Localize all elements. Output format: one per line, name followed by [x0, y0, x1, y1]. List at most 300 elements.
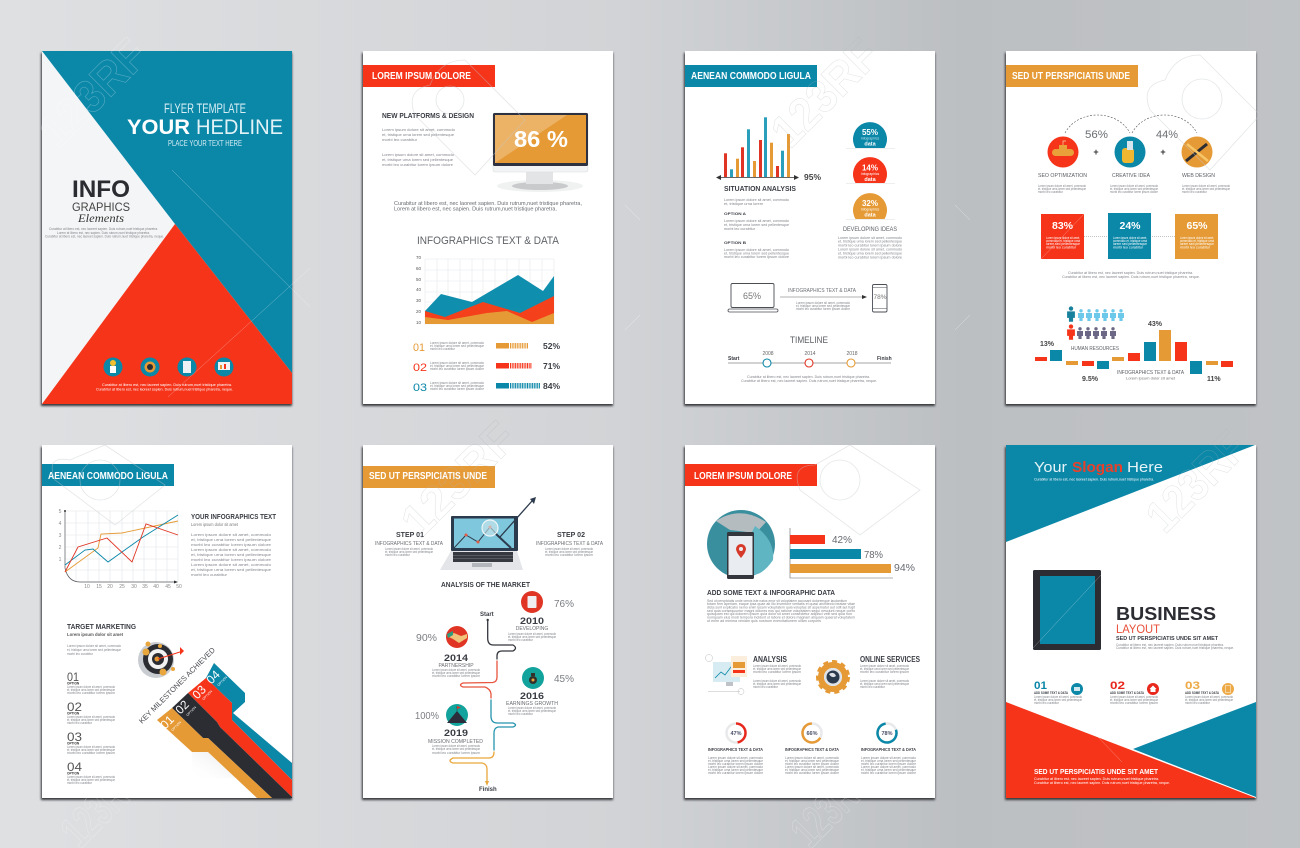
three labels: SEO OPTIMIZATION	[1038, 173, 1087, 179]
analysis text: ANALYSIS	[753, 655, 788, 664]
milestone 2014: 2014	[444, 653, 469, 664]
analysis text: morbi leo curabitur lorem ipsum	[753, 670, 801, 674]
gear icon	[818, 662, 848, 692]
target marketing text: TARGET MARKETING	[67, 624, 137, 631]
bar chart	[716, 117, 821, 182]
donut: 78 percent: Lorem ipsum dolore sit amet, commodo	[861, 756, 916, 760]
your infographics text: Lorem ipsum dolore sit amet, commodo	[191, 548, 271, 552]
ranked list: Lorem ipsum dolore sit amet, commodo	[430, 381, 484, 385]
situation analysis text: OPTION A	[724, 211, 746, 216]
milestone 2016: 45%	[554, 674, 574, 685]
donut: 47 percent: et, tristique urna lorem sed pellentesque	[708, 759, 763, 763]
header band: SED UT PERSPICIATIS UNDE	[369, 471, 487, 482]
add some text block: ADD SOME TEXT & INFOGRAPHIC DATA	[707, 588, 836, 597]
options list: morbi leo curabitur	[67, 721, 93, 725]
footer text: SED UT PERSPICIATIS UNDE SIT AMET	[1034, 769, 1159, 776]
ranked list: morbi leo curabitur lorem ipsum dolore	[430, 387, 484, 391]
online services text: et, tristique urna lorem sed pellentesque	[860, 682, 909, 686]
your infographics text: morbi leo curabitur lorem ipsum dolore	[191, 543, 271, 547]
analysis icon	[706, 654, 747, 694]
laptop to phone flow	[728, 284, 887, 312]
situation analysis text: et, tristique urna lorem sed pellentesque	[724, 223, 789, 227]
item 02	[1110, 680, 1159, 705]
key milestones ribbons: OPTION	[186, 705, 198, 717]
progress bars: 84%	[543, 381, 560, 391]
globe and phone	[707, 510, 775, 579]
your infographics text: morbi leo curabitur lorem ipsum dolore	[191, 558, 271, 562]
area chart: 50	[416, 277, 422, 282]
developing ideas text	[838, 227, 902, 260]
percentage boxes: commodo et, tristique urna	[1113, 239, 1147, 243]
timeline: 2018	[846, 351, 858, 357]
bar chart: 95%	[804, 172, 821, 182]
info graphics title: GRAPHICS	[72, 200, 130, 214]
add some text block: sed quia consequuntur magni dolores eos qui ratione voluptatem sequi nesciunt neque porro	[707, 609, 855, 613]
milestone 2016: EARNINGS GROWTH	[506, 701, 558, 707]
donut: 66 percent	[785, 720, 839, 775]
key milestones label: KEY MILESTONES ACHIEVED	[137, 645, 217, 725]
semicircle stats: data	[864, 212, 877, 218]
three labels: et, tristique urna lorem sed pellentesque	[1038, 187, 1086, 191]
caption: Curabitur at libero est, nec laoreet sapien. Duis rutrum,nuet tristique pharetra.	[1068, 271, 1193, 275]
online services text: et, tristique urna lorem sed pellentesque	[860, 667, 909, 671]
item 03: ADD SOME TEXT & DATA	[1185, 691, 1219, 695]
cover text block: Curabitur at libero est, nec laoreet sapien. Duis rutrum,nuet tristique pharetra.	[49, 227, 158, 231]
milestone 2014: et, tristique urna lorem sed pellentesque	[432, 671, 480, 675]
milestone 2016	[506, 667, 574, 716]
step 01: STEP 01	[396, 532, 424, 539]
footer text: Curabitur at libero est, nec laoreet sapien. Duis rutrum,nuet tristique pharetra.	[1034, 777, 1159, 781]
your infographics text: Lorem ipsum dolore sit amet, commodo	[191, 533, 271, 537]
laptop to phone flow: morbi leo curabitur lorem ipsum dolore	[796, 307, 850, 311]
percentage boxes	[1041, 213, 1218, 259]
milestone 2014: 90%	[416, 633, 437, 644]
options list: 01	[67, 670, 79, 684]
milestone 2014	[416, 626, 480, 678]
item 03	[1185, 680, 1234, 705]
timeline: Curabitur at libero est, nec laoreet sapien. Duis rutrum,nuet tristique pharetra, neque.	[741, 379, 877, 383]
percentage boxes: commodo et, tristique urna	[1180, 239, 1214, 243]
line chart: 1	[59, 557, 62, 563]
progress bars: 71%	[543, 361, 560, 371]
add some text block: Sed ut perspiciatis unde omnis iste natus error sit voluptatem accusant doloremque laudantium	[707, 599, 847, 603]
three labels: CREATIVE IDEA	[1112, 173, 1150, 179]
cover headline: PLACE YOUR TEXT HERE	[168, 139, 242, 148]
situation analysis text: Lorem ipsum dolore sit amet, commodo	[724, 248, 789, 252]
line chart: 2	[59, 545, 62, 551]
cover text block: Curabitur at libero est, nec laoreet sapien. Duis rutrum,nuet tristique pharetra, neque.	[45, 234, 164, 238]
situation analysis text: morbi leo curabitur lorem ipsum dolore	[724, 255, 789, 259]
ranked list: Lorem ipsum dolore sit amet, commodo	[430, 361, 484, 365]
horizontal bar chart: 42%	[832, 535, 852, 546]
semicircle stats: data	[864, 177, 877, 183]
target marketing text	[67, 624, 137, 656]
page 5: target marketing	[42, 445, 292, 798]
top teal triangle	[1006, 445, 1255, 542]
milestone 2010: DEVELOPING	[516, 626, 548, 632]
online services text: ONLINE SERVICES	[860, 655, 921, 664]
analysis text: Lorem ipsum dolore sit amet, commodo	[753, 679, 801, 683]
situation analysis text: morbi leo curabitur	[724, 227, 756, 231]
options list: et, tristique urna lorem sed pellentesque	[67, 778, 115, 782]
line chart: 45	[165, 584, 171, 590]
info graphics title	[72, 176, 130, 225]
situation analysis text: SITUATION ANALYSIS	[724, 184, 796, 193]
footer text	[1034, 769, 1170, 785]
business title: BUSINESS	[1116, 604, 1216, 624]
semicircle stats: Infographics	[861, 208, 880, 212]
ranked list: Lorem ipsum dolore sit amet, commodo	[430, 341, 484, 345]
line chart: 50	[176, 584, 182, 590]
ranked list: et, tristique urna lorem sed pellentesque	[430, 344, 484, 348]
three labels	[1038, 173, 1230, 194]
page 6: analysis of the market	[363, 445, 613, 798]
percentage boxes: 83%	[1052, 220, 1074, 232]
step 01: et, tristique urna lorem sed pellentesque	[385, 550, 433, 554]
donut: 47 percent: morbi leo curabitur lorem ipsum dolore	[708, 771, 763, 775]
milestone 2010	[508, 591, 574, 642]
watermarks: 123RF	[1135, 420, 1257, 542]
milestone 2019: morbi leo curabitur lorem ipsum	[432, 751, 480, 755]
add some text block: totam rem aperiam, eaque ipsa quae ab illo inventore veritatis et quasi architecto beatae vitae	[707, 602, 855, 606]
donut: 47 percent	[708, 724, 763, 775]
options list: Lorem ipsum dolore sit amet, commodo	[67, 775, 115, 779]
developing ideas text: morbi leo curabitur lorem ipsum dolore	[838, 244, 902, 248]
line chart: 5	[59, 509, 62, 515]
semicircle stats: 32%	[862, 199, 878, 208]
caption: Curabitur at libero est, nec laoreet sapien. Duis rutrum,nuet tristique pharetra, neque.	[1062, 275, 1200, 279]
diverging bar chart: 13%	[1040, 341, 1055, 348]
percentage boxes: Lorem ipsum dolore sit amet,	[1046, 236, 1080, 240]
laptop to phone flow: 78%	[873, 294, 887, 301]
step 02: STEP 02	[557, 532, 585, 539]
milestone 2019	[415, 704, 483, 755]
timeline: 2014	[804, 351, 816, 357]
ranked list	[413, 341, 484, 394]
options list: Lorem ipsum dolore sit amet, commodo	[67, 715, 115, 719]
three labels: WEB DESIGN	[1182, 173, 1215, 179]
online services text: morbi leo curabitur lorem ipsum	[860, 670, 909, 674]
options list: morbi leo curabitur lorem ipsum	[67, 691, 115, 695]
chart caption	[1117, 370, 1184, 380]
dashed arcs with percentages: +	[1160, 147, 1166, 157]
developing ideas text: DEVELOPING IDEAS	[843, 227, 897, 233]
milestone 2016: 2016	[520, 691, 544, 702]
percentage boxes: morbi leo curabitur	[1113, 246, 1144, 250]
your infographics text: et, tristique urna lorem sed pellentesque	[191, 568, 271, 572]
caption	[1062, 271, 1200, 279]
intro text: NEW PLATFORMS & DESIGN	[382, 113, 474, 120]
cover text block: Lorem at libero est, nec sapien. Duis rutrum,nuet tristique pharetra.	[57, 231, 150, 235]
donut: 47 percent: INFOGRAPHICS TEXT & DATA	[708, 747, 763, 752]
timeline: Finish	[877, 356, 892, 362]
percentage boxes: morbi leo curabitur	[1180, 246, 1211, 250]
options list: OPTION	[67, 682, 80, 686]
your infographics text	[191, 514, 277, 577]
your infographics text: Lorem ipsum dolore sit amet, commodo	[191, 563, 271, 567]
area chart: 20	[416, 309, 422, 314]
item 02: morbi leo curabitur lorem ipsum	[1110, 701, 1158, 705]
donut: 66 percent: et, tristique urna lorem sed pellentesque	[785, 759, 839, 763]
slogan: Here	[1127, 459, 1163, 476]
ranked list: et, tristique urna lorem sed pellentesque	[430, 364, 484, 368]
analysis text: et, tristique urna lorem sed pellentesque	[753, 667, 801, 671]
semicircle stats	[846, 122, 895, 219]
add some text block: numquam eius modi tempora incidunt ut labore et dolore magnam aliquam quaerat voluptatem	[707, 616, 855, 620]
human resources label: HUMAN RESOURCES	[1071, 346, 1119, 352]
icon: target with coins	[138, 642, 184, 678]
line chart: 20	[107, 584, 113, 590]
cover footer text: Curabitur at libero est, nec laoreet sapien. Duis rutrum,nuet tristique pharetra.	[102, 383, 232, 387]
analysis text: morbi leo curabitur	[753, 685, 779, 689]
line chart: 3	[59, 533, 62, 539]
analysis text: Lorem ipsum dolore sit amet, commodo	[753, 664, 801, 668]
key milestones ribbons: OPTION	[202, 689, 214, 701]
three labels: et, tristique urna lorem sed pellentesque	[1182, 187, 1230, 191]
milestone 2016: Lorem ipsum dolore sit amet, commodo	[508, 706, 556, 710]
target marketing text: morbi leo curabitur	[67, 652, 94, 656]
percentage boxes: lorem sed pellentesque	[1046, 242, 1080, 246]
watermarks: 123RF	[390, 411, 526, 547]
item 01: ADD SOME TEXT & DATA	[1034, 691, 1068, 695]
header band	[685, 65, 817, 87]
donut: 66 percent: morbi leo curabitur lorem ipsum dolore	[785, 762, 839, 766]
options list	[67, 670, 115, 785]
milestone 2019: Lorem ipsum dolore sit amet, commodo	[432, 744, 480, 748]
options list: Lorem ipsum dolore sit amet, commodo	[67, 685, 115, 689]
ranked list: 03	[413, 382, 427, 394]
intro text	[382, 113, 474, 167]
business title: SED UT PERSPICIATIS UNDE SIT AMET	[1116, 636, 1219, 642]
horizontal bar chart: 78%	[864, 550, 883, 561]
percentage boxes: morbi leo curabitur	[1046, 246, 1077, 250]
developing ideas text: Lorem ipsum dolore sit amet, commodo	[838, 248, 902, 252]
milestone 2010: Lorem ipsum dolore sit amet, commodo	[508, 632, 556, 636]
developing ideas text: Lorem ipsum dolore sit amet, commodo	[838, 236, 902, 240]
timeline: Curabitur at libero est, nec laoreet sapien. Duis rutrum,nuet tristique pharetra.	[747, 375, 870, 379]
donut: 78 percent	[861, 721, 916, 775]
three labels: Lorem ipsum dolore sit amet, commodo	[1038, 184, 1086, 188]
milestone 2010: 2010	[520, 616, 544, 627]
add some text block: quisquam est qui dolorem ipsum quia dolor sit amet consectetur adipisci velit sed quia non	[707, 612, 852, 616]
options list: 04	[67, 760, 82, 774]
donut: 47 percent: et, tristique urna lorem sed pellentesque	[708, 768, 763, 772]
key milestones ribbons: 01	[157, 712, 177, 732]
developing ideas text: et, tristique urna lorem sed pellentesque	[838, 252, 902, 256]
item 02: 02	[1110, 680, 1125, 692]
tablet	[1033, 570, 1101, 650]
teal triangle	[42, 51, 292, 373]
item 01: 01	[1034, 680, 1047, 692]
semicircle stats: data	[864, 142, 877, 148]
cover headline	[127, 100, 283, 148]
header band	[363, 65, 495, 87]
item 01: et, tristique urna lorem sed pellentesque	[1034, 698, 1082, 702]
header band: LOREM IPSUM DOLORE	[694, 471, 792, 482]
donut: 78 percent: 78%	[881, 731, 893, 737]
situation analysis text: et, tristique urna lorem	[724, 202, 763, 206]
donut: 47 percent: 47%	[730, 731, 742, 737]
business title: LAYOUT	[1116, 624, 1160, 636]
key milestones ribbons: 02	[172, 697, 192, 717]
bottom red triangle	[1006, 702, 1256, 798]
item 02: et, tristique urna lorem sed pellentesque	[1110, 698, 1158, 702]
header band	[685, 464, 817, 486]
ranked list: morbi leo curabitur lorem ipsum dolore	[430, 367, 484, 371]
cover headline: YOUR	[127, 116, 190, 139]
milestone 2019: et, tristique urna lorem sed pellentesque	[432, 747, 480, 751]
step 01: morbi leo curabitur	[385, 553, 411, 557]
three labels: morbi leo curabitur lorem ipsum dolore	[1110, 190, 1158, 194]
intro text: morbi leo curabitur	[382, 138, 418, 142]
online services text: morbi leo curabitur	[860, 685, 886, 689]
milestone 2010: 76%	[554, 599, 574, 610]
info graphics title: Elements	[77, 211, 124, 225]
donut: 78 percent: morbi leo curabitur lorem ipsum dolore	[861, 771, 916, 775]
slogan: Your	[1034, 459, 1067, 476]
laptop to phone flow: et, tristique urna lorem sed pellentesque	[796, 304, 850, 308]
item 01: Lorem ipsum dolore sit amet, commodo	[1034, 695, 1082, 699]
donut: 66 percent: Lorem ipsum dolore sit amet, commodo	[785, 765, 839, 769]
donut: 66 percent: INFOGRAPHICS TEXT & DATA	[785, 747, 839, 752]
donut: 78 percent: INFOGRAPHICS TEXT & DATA	[861, 747, 916, 752]
online services text: Lorem ipsum dolore sit amet, commodo	[860, 664, 909, 668]
cover headline: HEDLINE	[196, 116, 283, 139]
step 02: Lorem ipsum dolore sit amet, commodo	[545, 547, 593, 551]
your infographics text: morbi leo curabitur	[191, 573, 228, 577]
ranked list: 01	[413, 342, 425, 354]
item 03: 03	[1185, 680, 1200, 692]
header band: SED UT PERSPICIATIS UNDE	[1012, 71, 1130, 82]
percentage boxes: commodo et, tristique urna	[1046, 239, 1080, 243]
step 01	[375, 532, 443, 557]
semicircle stats: Infographics	[861, 172, 880, 176]
chart heading: INFOGRAPHICS TEXT & DATA	[417, 235, 560, 247]
your infographics text: Lorem ipsum dolor sit amet	[191, 522, 239, 527]
laptop to phone flow: INFOGRAPHICS TEXT & DATA	[788, 288, 856, 294]
three labels: et, tristique urna lorem sed pellentesque	[1110, 187, 1158, 191]
options list: OPTION	[67, 772, 80, 776]
line chart: 30	[131, 584, 137, 590]
percentage boxes: 65%	[1186, 220, 1208, 232]
diverging bar chart: 11%	[1207, 376, 1221, 383]
business title: Curabitur at libero est, nec laoreet sapien. Duis rutrum,nuet tristique pharetra, neque.	[1116, 646, 1234, 650]
red triangle	[42, 224, 292, 404]
progress bars: 52%	[543, 341, 560, 351]
dashed arcs with percentages: 56%	[1085, 129, 1108, 141]
semicircle stats: 55%	[862, 128, 878, 137]
milestone 2019: MISSION COMPLETED	[428, 739, 483, 745]
key milestones ribbons	[157, 663, 292, 798]
page 1: flyer cover	[42, 51, 292, 404]
line chart: 35	[142, 584, 148, 590]
donut: 66 percent: et, tristique urna lorem sed pellentesque	[785, 768, 839, 772]
intro text: Lorem ipsum dolore sit amet, commodo	[382, 128, 455, 132]
dashed arcs with percentages: 44%	[1156, 129, 1178, 141]
paragraph: Lorem at libero est, nec sapien. Duis rutrum,nuet tristique pharetra.	[394, 206, 557, 212]
icon: submarine	[1048, 136, 1078, 168]
monitor with 86 percent: 86 %	[514, 126, 568, 152]
timeline	[728, 335, 892, 383]
icon: idea hand	[1114, 136, 1146, 168]
area chart: 40	[416, 287, 422, 292]
diverging bar chart: 9.5%	[1082, 376, 1099, 383]
cover footer text	[96, 383, 233, 392]
intro text: et, tristique urna lorem sed pellentesque	[382, 133, 454, 137]
milestone 2010: morbi leo curabitur	[508, 638, 534, 642]
slogan: Curabitur at libero est, nec laoreet sapien. Duis rutrum,nuet tristique pharetra.	[1034, 478, 1154, 482]
intro text: et, tristique urna lorem sed pellentesque	[382, 158, 453, 162]
watermarks: 123RF	[28, 28, 157, 157]
header band: LOREM IPSUM DOLORE	[372, 71, 471, 82]
line chart: 40	[153, 584, 159, 590]
key milestones ribbons: OPTION	[217, 675, 229, 687]
ranked list: 02	[413, 362, 427, 374]
three labels: morbi leo curabitur	[1182, 190, 1208, 194]
online services text	[860, 655, 921, 689]
business title: Curabitur at libero est, nec laoreet sapien. Duis rutrum,nuet tristique pharetra.	[1116, 643, 1224, 647]
donut: 47 percent: morbi leo curabitur lorem ipsum dolore	[708, 762, 763, 766]
dashed arcs with percentages: +	[1093, 147, 1099, 157]
percentage boxes: lorem sed pellentesque	[1180, 242, 1214, 246]
winding route	[450, 619, 516, 786]
situation analysis text: et, tristique urna lorem sed pellentesque	[724, 252, 789, 256]
area chart: 10	[416, 320, 422, 325]
page 3: situation analysis	[685, 51, 935, 404]
three labels: morbi leo curabitur	[1038, 190, 1064, 194]
item 02: ADD SOME TEXT & DATA	[1110, 691, 1144, 695]
chart caption: Lorem ipsum dolor sit amet	[1126, 376, 1176, 380]
bottom teal triangle	[1133, 702, 1256, 797]
semicircle stats: 14%	[862, 164, 878, 172]
line chart: 4	[59, 521, 62, 527]
start and finish labels: Finish	[479, 787, 497, 793]
step 01: INFOGRAPHICS TEXT & DATA	[375, 541, 443, 547]
three labels: Lorem ipsum dolore sit amet, commodo	[1110, 184, 1158, 188]
cover footer text: Curabitur at libero est, nec laoreet sapien. Duis rutrum,nuet tristique pharetra, neque.	[96, 388, 233, 392]
ranked list: et, tristique urna lorem sed pellentesque	[430, 384, 484, 388]
progress bars	[496, 341, 560, 391]
header band	[1006, 65, 1138, 87]
cover headline: FLYER TEMPLATE	[164, 100, 246, 116]
slogan	[1034, 459, 1163, 482]
item 03: morbi leo curabitur	[1185, 701, 1211, 705]
page 4: seo optimization	[1006, 51, 1256, 404]
area chart: 60	[416, 266, 422, 271]
milestone 2010: et, tristique urna lorem sed pellentesque	[508, 635, 556, 639]
chart caption: INFOGRAPHICS TEXT & DATA	[1117, 370, 1184, 376]
options list: morbi leo curabitur	[67, 781, 93, 785]
diverging bar chart	[1035, 321, 1233, 383]
business title	[1116, 604, 1234, 650]
add some text block	[707, 588, 855, 623]
developing ideas text: et, tristique urna lorem sed pellentesque	[838, 240, 902, 244]
timeline: Start	[728, 356, 740, 362]
info graphics title: INFO	[72, 176, 130, 203]
your infographics text: et, tristique urna lorem sed pellentesque	[191, 538, 271, 542]
developing ideas text: morbi leo curabitur lorem ipsum dolore	[838, 256, 902, 260]
donut: 47 percent: Lorem ipsum dolore sit amet, commodo	[708, 756, 763, 760]
options list: morbi leo curabitur lorem ipsum	[67, 751, 115, 755]
milestone 2019: 100%	[415, 711, 439, 722]
target marketing text: Lorem ipsum dolore sit amet, commodo	[67, 644, 121, 648]
analysis text	[753, 655, 801, 689]
donut: 47 percent: Lorem ipsum dolore sit amet, commodo	[708, 765, 763, 769]
slogan: Slogan	[1072, 459, 1123, 476]
watermarks: 123RF	[760, 28, 889, 157]
monitor with 86 percent	[493, 113, 588, 192]
line chart	[59, 509, 182, 590]
